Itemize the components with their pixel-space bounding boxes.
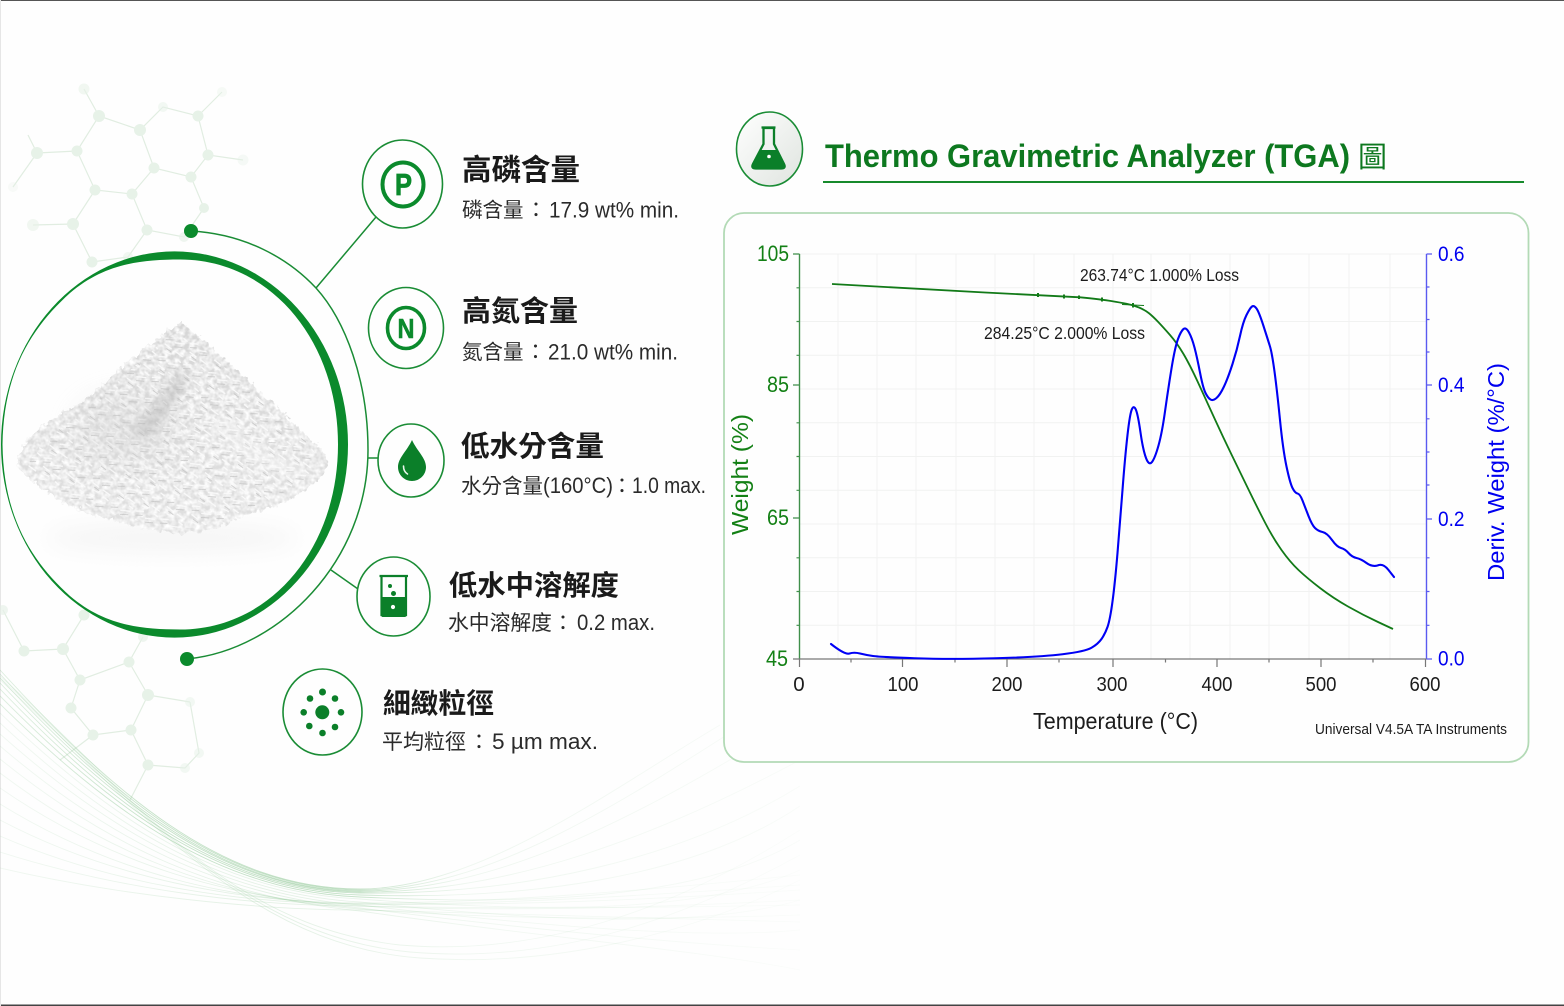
heading: TGA chart title: 圖: [1358, 142, 1387, 174]
axis title: temperature: Temperature (°C): [1033, 708, 1198, 734]
background: flowing green wave lines: [0, 670, 800, 970]
icon: P circle: P: [395, 167, 412, 202]
spec: nitrogen: [462, 340, 678, 364]
spec: phosphorus: 17.9 wt% min.: [549, 198, 679, 222]
heading: low moisture: 低水分含量: [461, 431, 604, 463]
axis: left weight axis: 85: [767, 372, 789, 397]
spec: nitrogen: 21.0 wt% min.: [548, 340, 678, 364]
spec: moisture: [461, 473, 706, 498]
axis: right derivative axis: 0.4: [1438, 374, 1465, 397]
spec: nitrogen: 氮含量: [462, 341, 524, 364]
icon: particles: [283, 669, 362, 755]
heading: high nitrogen: 高氮含量: [462, 295, 578, 328]
axis: right derivative axis: 0.6: [1438, 243, 1464, 266]
axis: left weight axis: [727, 241, 800, 671]
icon: beaker: [357, 557, 430, 636]
axis: temperature: [793, 659, 1440, 734]
axis title: weight: Weight (%): [727, 414, 753, 535]
image: white powder pile: [18, 323, 327, 534]
spec: particle size: 平均粒徑: [382, 731, 466, 754]
TGA header: [736, 112, 1524, 186]
axis: temperature: 600: [1410, 673, 1440, 696]
item: low moisture: [378, 424, 706, 498]
spec: moisture: ：: [612, 475, 632, 498]
spec: moisture: 1.0 max.: [632, 473, 706, 498]
axis title: derivative weight: Deriv. Weight (%/°C): [1483, 363, 1509, 581]
annotation: 1% loss: 263.74°C 1.000% Loss: [1080, 265, 1239, 285]
axis: temperature: 100: [888, 673, 918, 696]
curve: derivative weight: [831, 306, 1394, 659]
icon: P circle: [362, 140, 442, 228]
item: high phosphorus: [362, 140, 679, 228]
heading: low water solubility: 低水中溶解度: [449, 570, 619, 601]
icon: N circle: [368, 288, 444, 368]
axis: left weight axis: 45: [766, 646, 788, 671]
axis: right derivative axis: 0.2: [1438, 508, 1464, 531]
main powder circle: [1, 251, 348, 638]
axis: temperature: 0: [793, 673, 805, 696]
item: high nitrogen: [368, 288, 678, 368]
spec: phosphorus: 磷含量: [462, 199, 524, 222]
annotation: 2% loss: 284.25°C 2.000% Loss: [984, 323, 1145, 343]
heading: high phosphorus: 高磷含量: [462, 154, 580, 187]
heading: fine particle size: 細緻粒徑: [383, 688, 494, 719]
spec: solubility: 水中溶解度: [448, 612, 552, 635]
thick green crescent ring: [1, 251, 348, 638]
outer thin arc with end dots: [180, 224, 368, 666]
background: molecular hexagon network: [0, 84, 248, 800]
item: low water solubility: [357, 557, 655, 636]
axis: right derivative axis: 0.0: [1438, 648, 1464, 670]
spec: phosphorus: [462, 198, 679, 222]
axis: temperature: 200: [992, 673, 1022, 696]
circle interior: [2, 254, 346, 636]
spec: nitrogen: ：: [525, 341, 546, 364]
icon: water drop: [378, 424, 444, 497]
spec: particle size: 5 µm max.: [492, 729, 598, 754]
axis: temperature: 300: [1096, 673, 1128, 696]
spec: particle size: ：: [469, 731, 489, 754]
spec: solubility: ：: [553, 612, 573, 635]
spec: moisture: (160°C): [543, 473, 613, 498]
title underline: [823, 181, 1524, 183]
heading: TGA chart title: Thermo Gravimetric Analyzer (TGA): [825, 138, 1350, 174]
instrument note: Universal V4.5A TA Instruments: [1315, 722, 1507, 738]
connector lines: [316, 217, 379, 589]
axis: temperature: 500: [1306, 673, 1336, 696]
icon: N circle: N: [398, 313, 414, 344]
spec: solubility: 0.2 max.: [577, 610, 655, 635]
axis: right derivative axis: [1426, 243, 1509, 670]
powder floor shadow: [47, 524, 297, 552]
chart grid: [799, 254, 1426, 659]
axis: left weight axis: 65: [767, 505, 789, 530]
panel: TGA chart: [724, 213, 1528, 762]
curve: weight: [832, 284, 1393, 629]
spec: phosphorus: ：: [526, 199, 546, 222]
spec: particle size: [382, 729, 598, 754]
item: fine particle size: [283, 669, 598, 755]
spec: solubility: [448, 610, 655, 635]
spec: moisture: 水分含量: [461, 475, 543, 498]
axis: left weight axis: 105: [757, 241, 789, 266]
axis: temperature: 400: [1202, 673, 1232, 696]
icon: flask: [736, 112, 802, 186]
